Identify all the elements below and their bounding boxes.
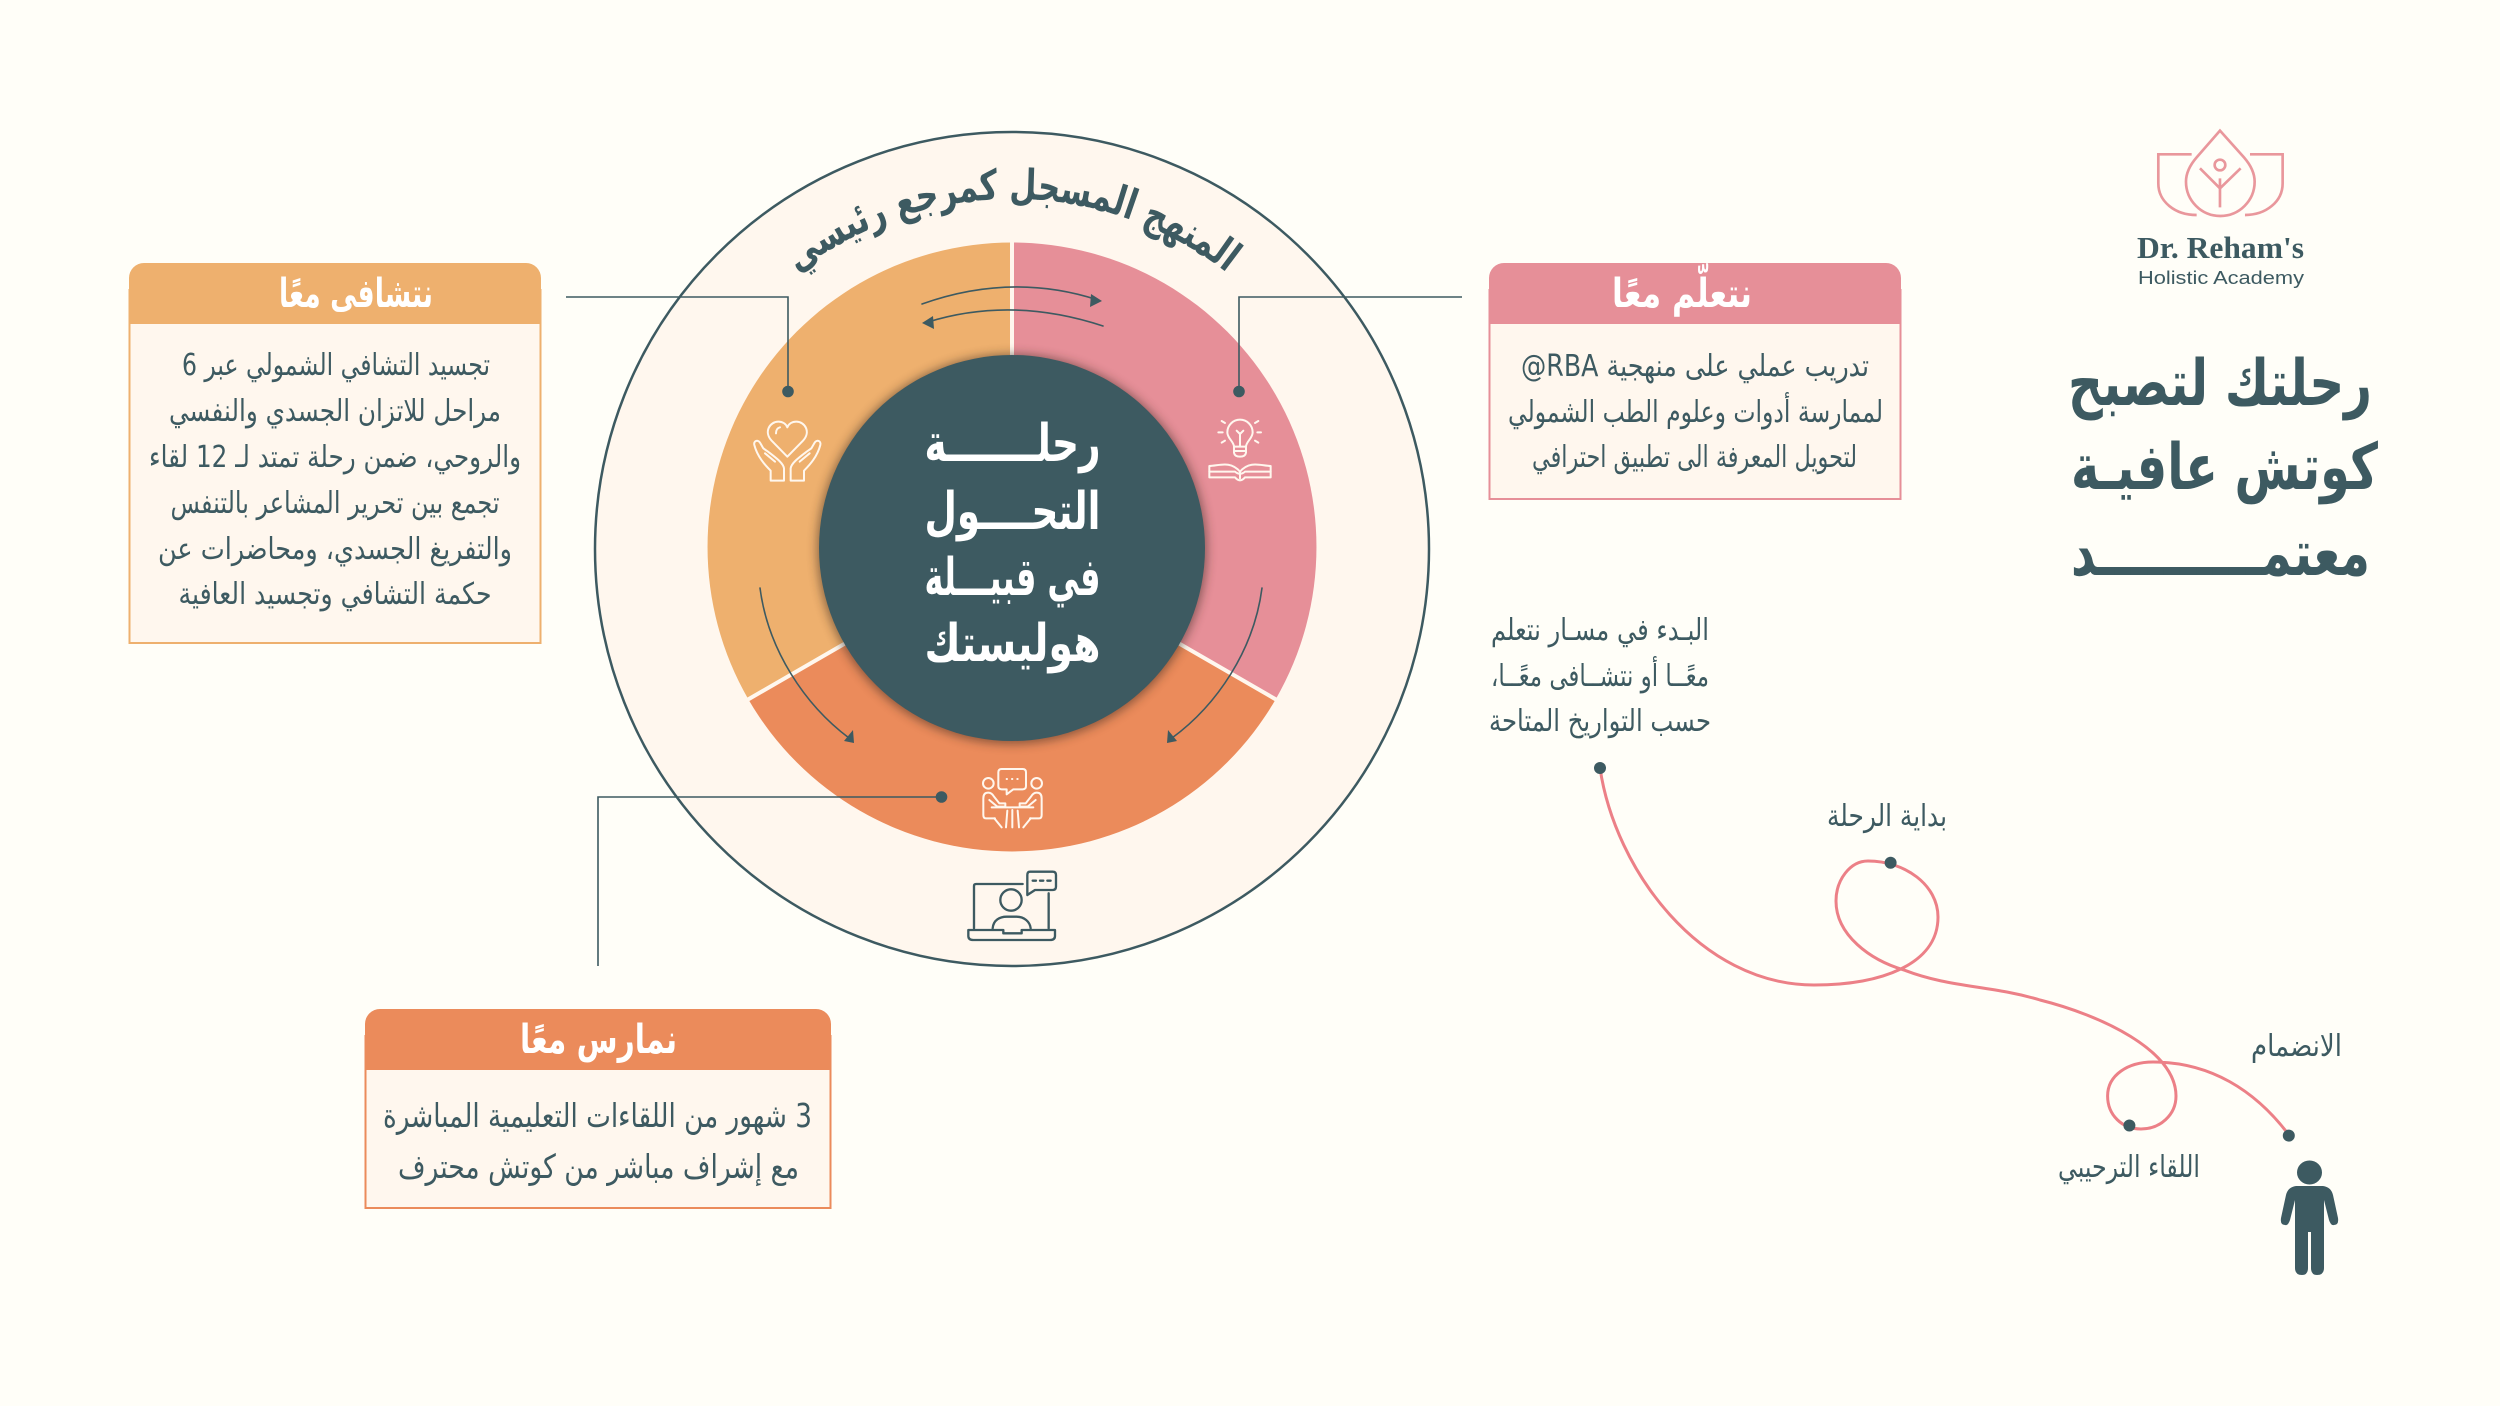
panel body text: والروحي، ضمن رحلة تمتد لـ 12 لقاء [149, 440, 521, 475]
icon: laptop video call [968, 872, 1056, 940]
main title: كوتش عافيـة [2071, 431, 2379, 505]
connector: practice panel to segment [598, 792, 946, 966]
panel heading: نمارس معًا [520, 1017, 677, 1063]
main title: رحلتك لتصبح [2068, 347, 2372, 421]
panel heading: نتعلّم معًا [1612, 263, 1752, 317]
panel body text: والتفريغ الجسدي، ومحاضرات عن [158, 532, 512, 567]
icon: light bulb and open book [1209, 420, 1271, 480]
journey label: welcome meeting: اللقاء الترحيبي [2058, 1150, 2200, 1185]
segment: practice together (deep orange) [748, 547, 1276, 851]
panel body text: لتحويل المعرفة الى تطبيق احترافي [1532, 440, 1857, 475]
journey label: journey start: بداية الرحلة [1827, 799, 1947, 834]
panel body text [383, 1096, 812, 1187]
panel heading: نتشافى معًا [279, 271, 433, 317]
outer circle: programme wheel [595, 132, 1429, 966]
segment: heal together (yellow orange) [708, 242, 1012, 699]
brand name: Dr. Reham's [2137, 230, 2304, 265]
journey stops [1594, 762, 2295, 1142]
panel: learn together [1489, 263, 1901, 499]
journey label: start in a track [1489, 613, 1711, 739]
curved heading on the ring: المنهج المسجل كمرجع رئيسي [795, 167, 1244, 275]
main title [2068, 347, 2379, 591]
centre title [924, 414, 1100, 674]
panel body text: تجسيد التشافي الشمولي عبر 6 [182, 348, 490, 383]
panel body text: حكمة التشافي وتجسيد العافية [178, 577, 492, 612]
centre circle [819, 355, 1205, 741]
brand subtitle: Holistic Academy [2138, 267, 2305, 288]
panel body text: مراحل للاتزان الجسدي والنفسي [169, 394, 501, 429]
panel: heal together [129, 263, 541, 643]
centre title: رحلـــــــة [924, 414, 1100, 474]
panel: practice together [365, 1009, 831, 1208]
segment: learn together (pink) [1012, 242, 1316, 699]
arrow: heal to practice [760, 588, 854, 743]
connector: learn panel to segment [1234, 297, 1462, 396]
panel body text: مع إشراف مباشر من كوتش محترف [398, 1147, 799, 1187]
logo: Dr. Reham's Holistic Academy [2137, 131, 2305, 288]
panel body text: لممارسة أدوات وعلوم الطب الشمولي [1508, 391, 1883, 430]
arrow: learn to practice [1167, 588, 1262, 743]
panel body text [1508, 349, 1883, 475]
icon: two people meeting [983, 769, 1042, 827]
panel body text [149, 348, 521, 612]
journey label: joining: الانضمام [2251, 1029, 2342, 1064]
icon: lotus logo mark [2158, 131, 2283, 216]
journey label: start in a track: البـدء في مسـار نتعلم [1491, 613, 1709, 648]
journey path [1594, 762, 2295, 1142]
journey label: start in a track: معًــا أو نتشــافى معًــا، [1491, 655, 1709, 694]
panel body text: 3 شهور من اللقاءات التعليمية المباشرة [383, 1096, 812, 1135]
panel body text: تجمع بين تحرير المشاعر بالتنفس [170, 486, 500, 521]
icon: person [2281, 1160, 2338, 1275]
arrows: exchange between learn and heal [922, 287, 1103, 329]
connector: heal panel to segment [566, 297, 793, 396]
panel body text: تدريب عملي على منهجية RBA@ [1521, 349, 1869, 384]
centre title: في قبيـــلة [924, 548, 1100, 608]
centre title: هوليستك [924, 614, 1100, 674]
main title: معتمــــــــــد [2071, 517, 2370, 591]
centre title: التحــــول [924, 482, 1100, 542]
journey label: start in a track: حسب التواريخ المتاحة [1489, 704, 1711, 739]
icon: hands holding heart [754, 422, 820, 481]
